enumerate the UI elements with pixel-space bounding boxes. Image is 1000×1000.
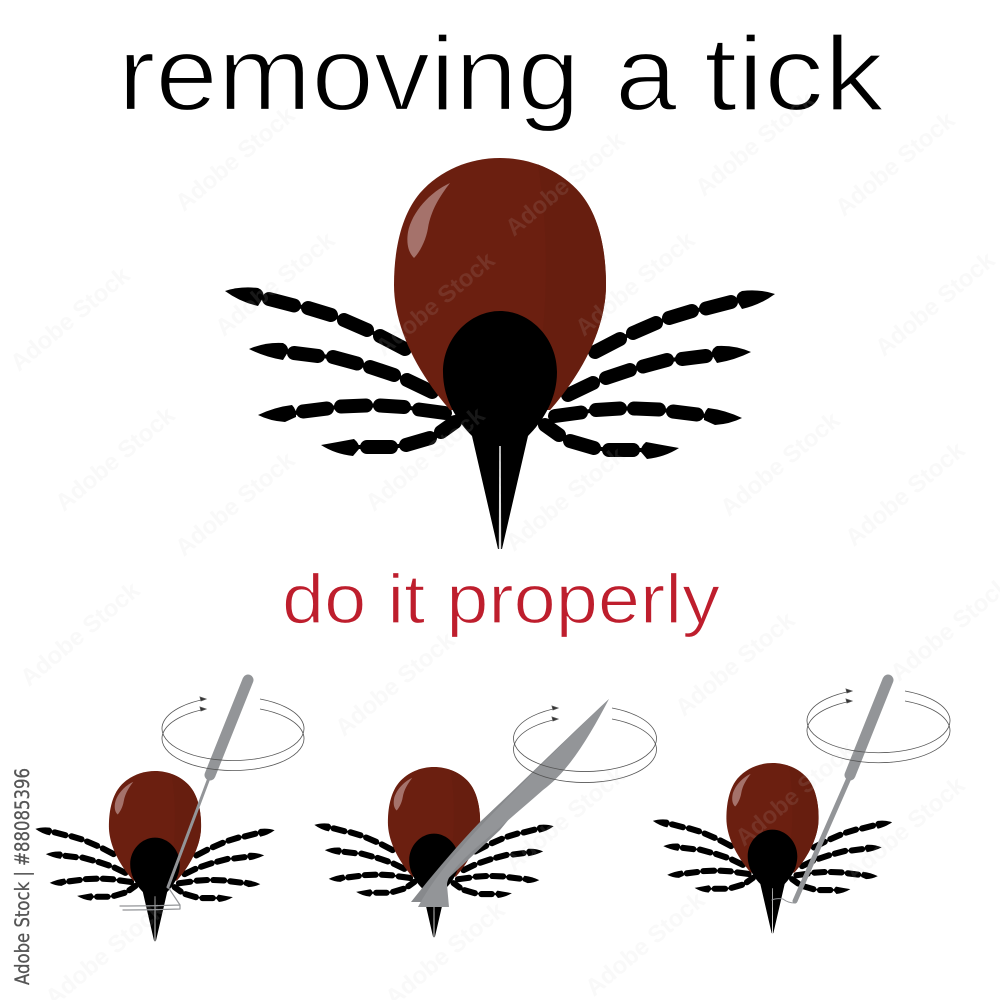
- tweezers back blade: [411, 699, 609, 902]
- watermarks: Adobe Stock: [500, 761, 631, 877]
- watermarks: Adobe Stock: [870, 246, 1000, 362]
- watermarks: Adobe Stock: [170, 446, 301, 562]
- tick: [653, 760, 892, 933]
- watermarks: Adobe Stock: [715, 406, 846, 522]
- watermarks: Adobe Stock: [5, 261, 136, 377]
- subtitle: do it properly: [282, 560, 720, 638]
- lasso tool: [772, 680, 888, 903]
- watermarks: Adobe Stock: [330, 626, 461, 742]
- hypostome slit: [499, 446, 501, 549]
- step 1: tick with hook tool: [35, 680, 304, 941]
- head and mouthparts: [443, 311, 557, 549]
- title: [118, 15, 885, 133]
- watermarks: Adobe Stock: [580, 886, 711, 1000]
- watermarks: Adobe Stock: [15, 576, 146, 692]
- rotation arrows: [514, 706, 656, 783]
- tweezers front blade: [418, 699, 609, 907]
- rotation arrows: [162, 697, 304, 771]
- tick: [35, 768, 275, 941]
- watermarks: Adobe Stock: [840, 771, 971, 887]
- watermarks: Adobe Stock: [170, 101, 301, 217]
- watermarks: Adobe Stock: [830, 106, 961, 222]
- title: removing: [118, 15, 580, 133]
- title: a: [615, 15, 677, 133]
- watermarks: Adobe Stock: [840, 436, 971, 552]
- removal hook tool: [120, 680, 248, 910]
- highlight: [407, 183, 450, 258]
- watermarks: Adobe Stock: [500, 441, 631, 557]
- tick: [314, 764, 554, 937]
- stock credit text: Adobe Stock | #88085396: [11, 768, 34, 985]
- step 2: tick with tweezers: [314, 699, 656, 937]
- body: [394, 158, 606, 410]
- left legs: [225, 287, 455, 456]
- watermarks: Adobe Stock: [670, 606, 801, 722]
- watermarks: Adobe Stock: [360, 401, 491, 517]
- watermarks: Adobe Stock: [730, 736, 861, 852]
- watermarks: Adobe Stock: [690, 86, 821, 202]
- right legs: [545, 290, 775, 459]
- body shading: [530, 150, 620, 420]
- watermarks: Adobe Stock: [50, 401, 181, 517]
- title: tick: [704, 15, 885, 133]
- watermarks: Adobe Stock: [210, 226, 341, 342]
- rotation arrows: [807, 689, 950, 763]
- main tick illustration: [225, 150, 775, 549]
- watermarks: Adobe Stock: [570, 226, 701, 342]
- watermarks: Adobe Stock: [500, 126, 631, 242]
- step 3: tick with lasso tool: [653, 680, 950, 933]
- watermarks: Adobe Stock: [370, 246, 501, 362]
